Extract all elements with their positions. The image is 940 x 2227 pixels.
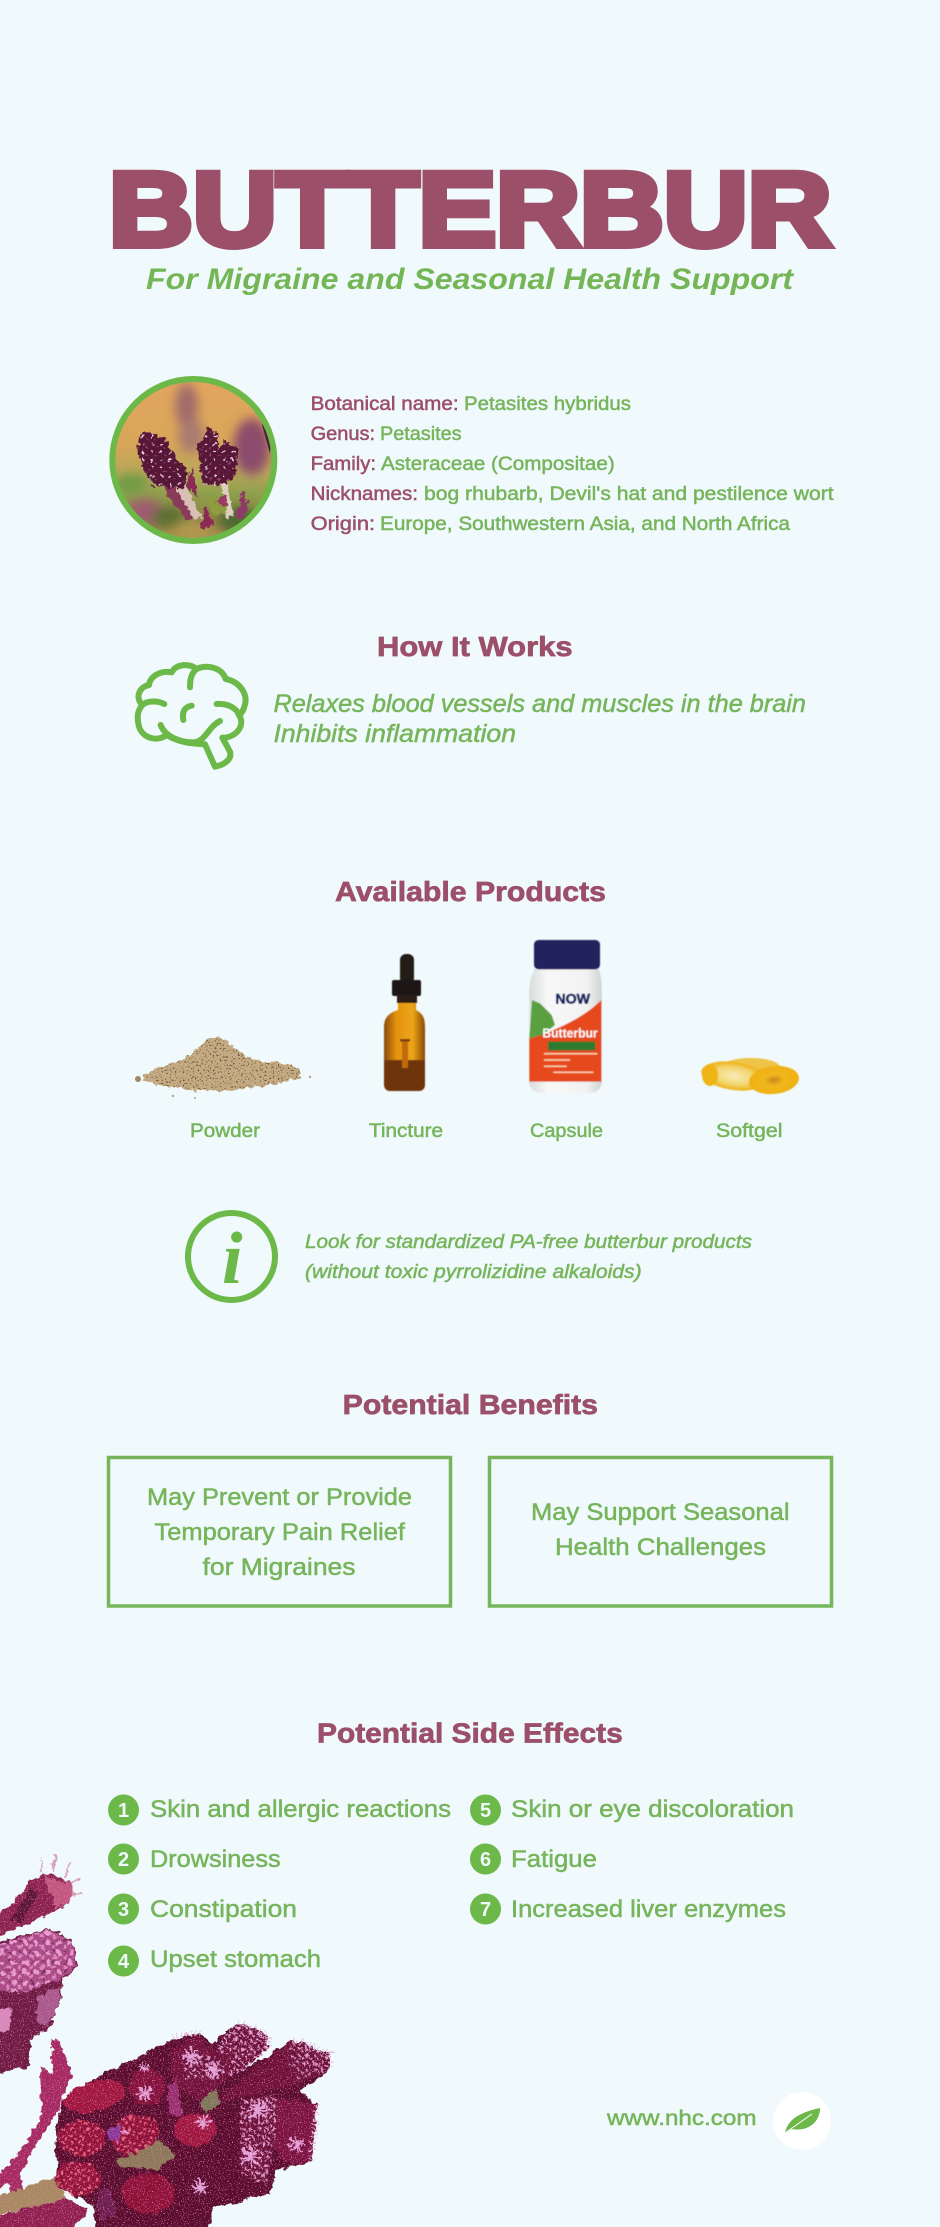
callout: PA-free note [305, 1231, 752, 1283]
icon: info circle [188, 1213, 275, 1300]
benefit box 2 [490, 1458, 832, 1606]
side effect 4: Upset stomach [150, 1946, 321, 1973]
botanical facts text block: Petasites hybridus [464, 393, 631, 415]
how it works text [274, 690, 806, 748]
botanical facts text block: Asteraceae (Compositae) [381, 453, 615, 475]
side effect 2 [108, 1844, 281, 1874]
side effect 5: Skin or eye discoloration [511, 1796, 794, 1823]
side effect 7: 7 [480, 1899, 491, 1921]
icon: info circle: i [222, 1218, 243, 1300]
side effect 4: 4 [118, 1951, 130, 1973]
botanical facts text block [311, 393, 834, 535]
benefit box 1 [108, 1458, 450, 1606]
icon: brain [138, 665, 246, 767]
title: BUTTERBUR [109, 152, 832, 268]
product: tincture dropper bottle [384, 954, 425, 1091]
callout: PA-free note: Look for standardized PA-free butterbur products [305, 1231, 752, 1253]
side effect 6: 6 [480, 1849, 491, 1871]
side effect 1: 1 [118, 1800, 129, 1822]
side effect 3: Constipation [150, 1896, 297, 1923]
side effect 6 [470, 1844, 597, 1874]
product: softgel capsules [699, 1058, 800, 1097]
heading: potential side effects: Potential Side Effects [317, 1718, 623, 1748]
how it works text: Relaxes blood vessels and muscles in the brain [274, 690, 806, 718]
side effect 4 [108, 1946, 321, 1976]
product labels [190, 1121, 782, 1142]
heading: how it works: How It Works [377, 631, 573, 662]
benefit box 1: for Migraines [202, 1554, 356, 1581]
how it works text: Inhibits inflammation [274, 720, 516, 748]
side effect 3: 3 [118, 1899, 129, 1921]
product: capsule bottle [529, 940, 602, 1093]
product labels: Softgel [716, 1121, 782, 1142]
benefit box 1: May Prevent or Provide [147, 1484, 412, 1511]
product: capsule bottle: Butterbur [542, 1026, 598, 1040]
callout: PA-free note: (without toxic pyrrolizidine alkaloids) [305, 1261, 642, 1283]
heading: potential benefits: Potential Benefits [343, 1389, 598, 1420]
side effect 7: Increased liver enzymes [511, 1896, 786, 1923]
website url: www.nhc.com [606, 2107, 757, 2130]
side effect 3 [108, 1894, 297, 1924]
botanical facts text block: Family: [311, 453, 376, 475]
decorative butterbur flowers, bottom left [0, 1855, 330, 2227]
botanical facts text block: Origin: [311, 513, 375, 535]
benefit box 2: May Support Seasonal [531, 1499, 790, 1526]
botanical facts text block: Nicknames: [311, 483, 418, 505]
subtitle: For Migraine and Seasonal Health Support [146, 263, 794, 296]
side effect 2: 2 [118, 1849, 129, 1871]
icon: leaf logo [773, 2092, 831, 2150]
product labels: Powder [190, 1121, 261, 1142]
side effect 6: Fatigue [511, 1846, 597, 1873]
side effect 2: Drowsiness [150, 1846, 281, 1873]
benefit box 1: Temporary Pain Relief [154, 1519, 405, 1546]
botanical facts text block: Botanical name: [311, 393, 459, 415]
product labels: Tincture [369, 1121, 443, 1142]
side effect 1: Skin and allergic reactions [150, 1796, 451, 1823]
botanical facts text block: Petasites [380, 423, 462, 445]
photo: butterbur flower in circle [110, 377, 277, 543]
product: capsule bottle: NOW [555, 990, 591, 1006]
product labels: Capsule [530, 1121, 603, 1142]
botanical facts text block: Europe, Southwestern Asia, and North Africa [380, 513, 790, 535]
botanical facts text block: bog rhubarb, Devil's hat and pestilence wort [424, 483, 834, 505]
side effect 5: 5 [480, 1800, 491, 1822]
product: powder [135, 1037, 311, 1099]
benefit box 2: Health Challenges [555, 1534, 766, 1561]
botanical facts text block: Genus: [311, 423, 375, 445]
heading: available products: Available Products [335, 876, 606, 907]
